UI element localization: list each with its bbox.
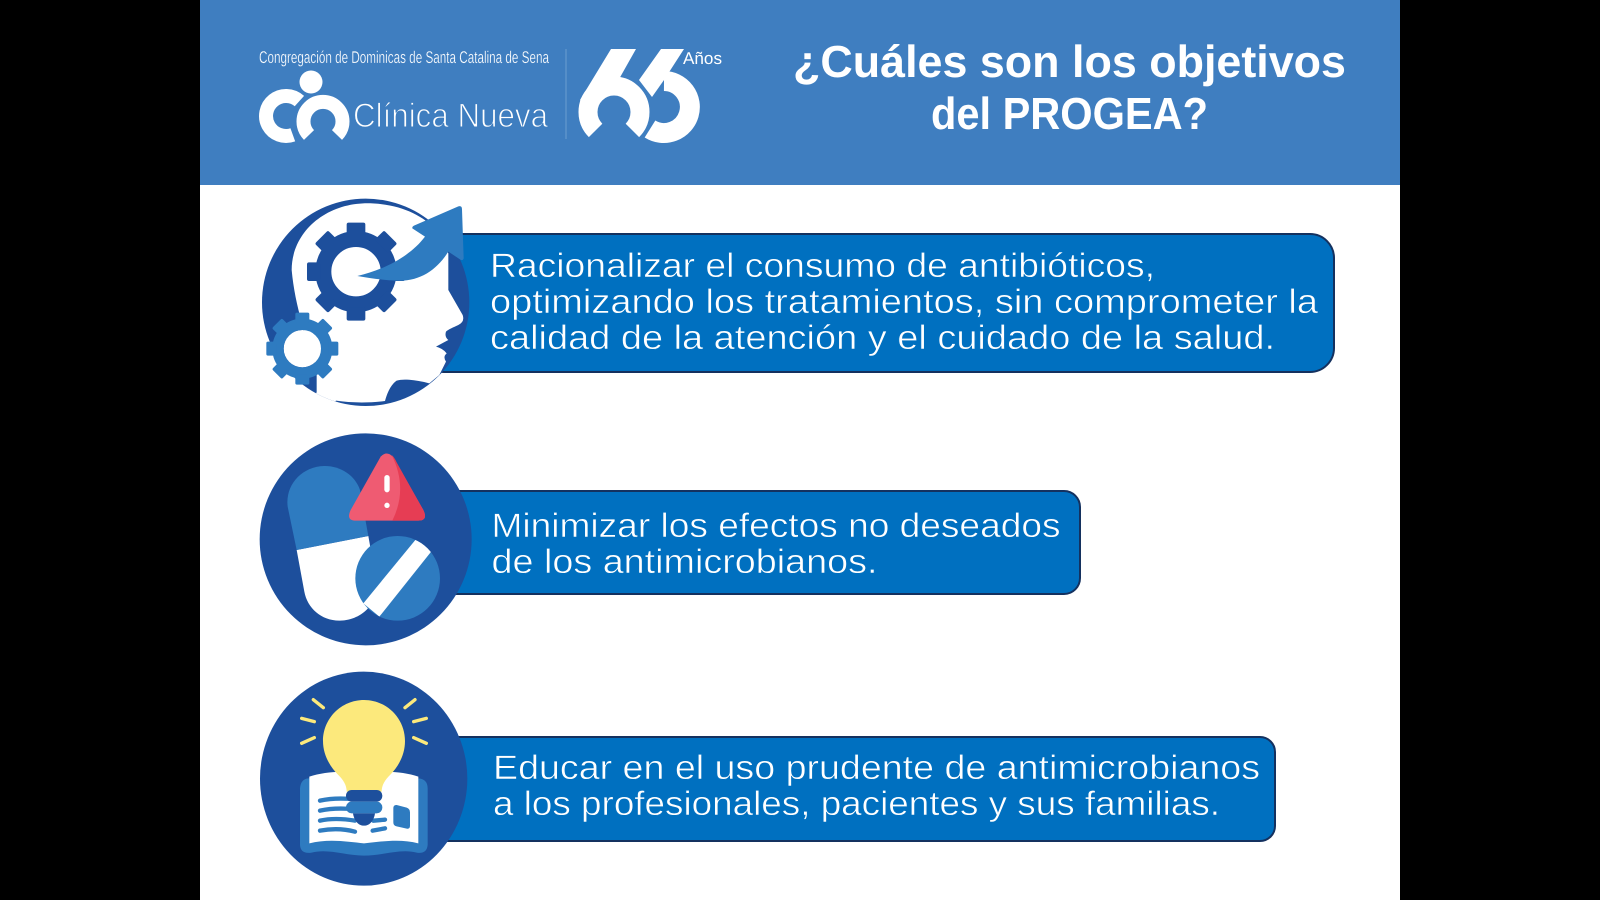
icon: light bulb and book xyxy=(260,672,467,886)
objective 1 text xyxy=(490,247,1318,357)
book picture xyxy=(393,805,410,829)
book text lines xyxy=(320,799,385,832)
title: del PROGEA? xyxy=(931,88,1208,139)
arrow xyxy=(357,206,464,281)
years label: Años xyxy=(683,49,722,68)
objective 2 text: de los antimicrobianos. xyxy=(492,543,878,581)
warning triangle xyxy=(349,453,425,521)
objective 1 bar xyxy=(420,234,1334,372)
book pages xyxy=(309,772,418,843)
icon: head with gears and arrow xyxy=(262,199,469,423)
objective 1 text: Racionalizar el consumo de antibióticos, xyxy=(490,247,1155,285)
objective 3 bar xyxy=(430,737,1275,841)
bulb xyxy=(323,700,405,826)
objective 2 text: Minimizar los efectos no deseados xyxy=(492,507,1060,545)
second numeral xyxy=(639,49,690,133)
logo wordmark: Clínica Nueva xyxy=(353,97,548,135)
capsule blue half xyxy=(287,466,368,550)
objective 1 text: optimizando los tratamientos, sin comprometer la xyxy=(490,283,1318,321)
title: ¿Cuáles son los objetivos xyxy=(793,36,1346,87)
round tablet xyxy=(355,536,440,621)
light gear xyxy=(266,313,338,385)
logo tagline: Congregación de Dominicas de Santa Catalina de Sena xyxy=(259,48,549,67)
title xyxy=(793,36,1346,139)
capsule white half xyxy=(297,536,377,621)
objective 1 text: calidad de la atención y el cuidado de la salud. xyxy=(490,319,1275,357)
objective 2 text xyxy=(492,507,1060,581)
objective 3 text: Educar en el uso prudente de antimicrobianos xyxy=(493,749,1260,787)
white content panel xyxy=(200,0,1400,900)
objective 3 text xyxy=(493,749,1260,823)
dark gear xyxy=(307,223,405,321)
objective 2 bar xyxy=(440,491,1080,594)
first numeral xyxy=(580,49,640,130)
head silhouette xyxy=(292,203,463,423)
bulb rays xyxy=(302,700,426,743)
objective 3 text: a los profesionales, pacientes y sus familias. xyxy=(493,785,1220,823)
logo: Clínica Nueva xyxy=(259,48,549,136)
logo symbol xyxy=(266,70,342,136)
icon: pills and warning xyxy=(260,433,472,645)
logo: 65 años xyxy=(566,49,722,139)
header band xyxy=(200,0,1400,185)
book cover xyxy=(300,778,428,856)
